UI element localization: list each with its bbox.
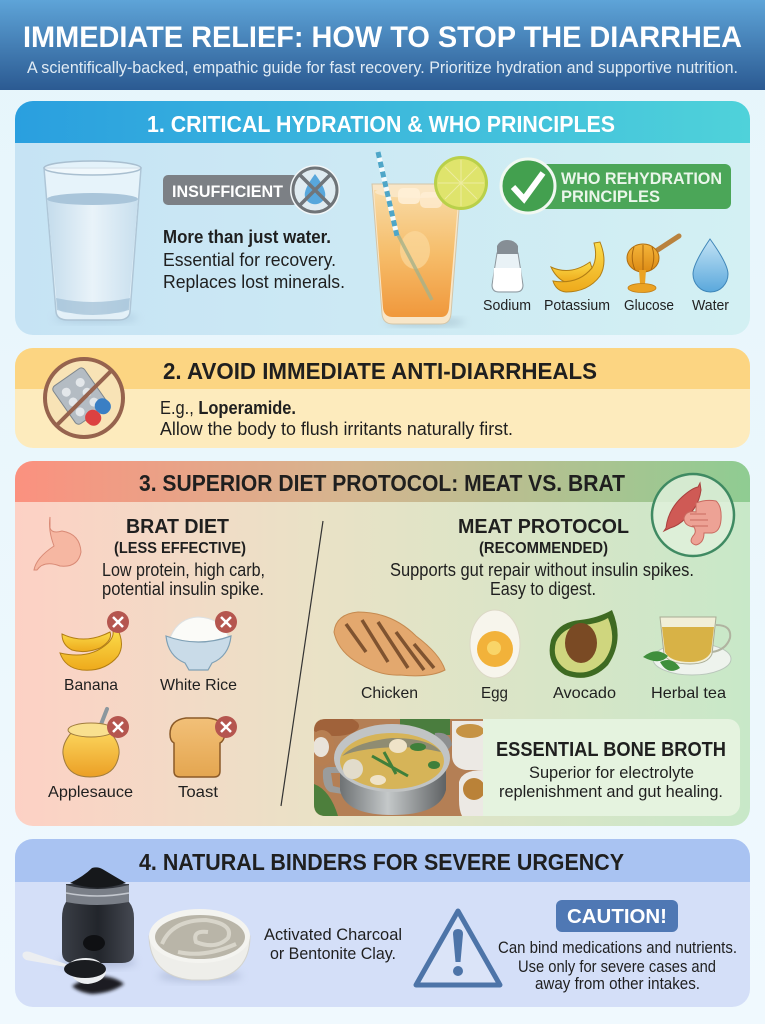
label: banana: Banana (64, 677, 118, 694)
panel: natural binders (15, 839, 750, 1007)
panel: essential bone broth (309, 716, 740, 816)
label: potassium: Potassium (544, 297, 610, 314)
heading: section 1: 1. CRITICAL HYDRATION & WHO PRINCIPLES (147, 111, 615, 137)
text: caution note: Can bind medications and nutrients. (498, 939, 737, 957)
text: more than just water (163, 227, 345, 292)
icon: boiled egg (470, 610, 520, 678)
panel: diet protocol (15, 461, 750, 826)
panel: critical hydration (15, 101, 750, 335)
subtitle: A scientifically-backed, empathic guide for fast recovery. Prioritize hydration and supportive nutrition. (27, 59, 738, 77)
text: bone broth: replenishment and gut healing. (499, 783, 723, 801)
text: loperamide note (160, 398, 513, 439)
label: avocado: Avocado (553, 685, 616, 702)
icon: rehydration drink (372, 152, 488, 326)
icon: no pills (45, 359, 123, 437)
heading: meat protocol: (RECOMMENDED) (479, 540, 608, 557)
icon: water drop (693, 239, 728, 292)
heading: brat diet (114, 516, 246, 557)
text: caution note: Use only for severe cases and (518, 958, 716, 976)
icon: applesauce jar (63, 709, 119, 777)
panel: avoid anti-diarrheals (15, 348, 750, 448)
icon: warning triangle (416, 911, 500, 985)
title: IMMEDIATE RELIEF: HOW TO STOP THE DIARRHEA (23, 21, 742, 54)
text: meat description (390, 560, 694, 599)
text: bone broth (496, 739, 726, 801)
text: loperamide note: Allow the body to flush irritants naturally first. (160, 419, 513, 439)
text: charcoal or clay (264, 925, 402, 963)
label: sodium: Sodium (483, 297, 531, 314)
label: glucose: Glucose (624, 297, 674, 314)
label: white rice: White Rice (160, 677, 237, 694)
icon: glass of water (44, 161, 141, 323)
badge: who rehydration principles: PRINCIPLES (561, 187, 660, 206)
icon: toast (170, 718, 225, 777)
text: charcoal or clay: or Bentonite Clay. (270, 944, 396, 963)
label: chicken: Chicken (361, 685, 418, 702)
label: egg: Egg (481, 685, 508, 702)
icon: potassium banana (551, 242, 604, 292)
text: charcoal or clay: Activated Charcoal (264, 925, 402, 944)
text: caution note: away from other intakes. (535, 975, 700, 993)
heading: section 3: 3. SUPERIOR DIET PROTOCOL: MEAT VS. BRAT (139, 470, 625, 496)
icon: grilled chicken (334, 612, 445, 676)
icon: banana (60, 630, 122, 670)
text: meat description: Easy to digest. (490, 579, 596, 599)
text: more than just water: Replaces lost minerals. (163, 272, 345, 292)
badge: who rehydration principles: WHO REHYDRATION (561, 169, 722, 188)
text: brat description: Low protein, high carb, (102, 560, 265, 580)
heading: section 2: 2. AVOID IMMEDIATE ANTI-DIARRHEALS (163, 358, 597, 384)
badge: who rehydration principles (501, 159, 731, 213)
icon: glucose honey (627, 236, 679, 292)
text: caution note (498, 939, 737, 993)
icon: bentonite clay bowl (149, 909, 250, 982)
text: brat description: potential insulin spike. (102, 579, 264, 599)
label: applesauce: Applesauce (48, 784, 133, 801)
icon: activated charcoal jar (22, 867, 136, 994)
icon: sodium salt shaker (492, 240, 523, 292)
heading: meat protocol (458, 516, 629, 557)
icons: x badges (107, 611, 237, 738)
text: meat description: Supports gut repair without insulin spikes. (390, 560, 694, 580)
text: more than just water: More than just water. (163, 227, 331, 247)
icon: herbal tea (643, 617, 731, 675)
icon: avocado (550, 610, 618, 678)
text: loperamide note: E.g., Loperamide. (160, 398, 296, 418)
icon: rice bowl (166, 617, 231, 670)
heading: brat diet: (LESS EFFECTIVE) (114, 540, 246, 557)
badge: insufficient (163, 165, 340, 215)
badge: caution (556, 900, 678, 932)
label: water: Water (692, 297, 729, 314)
text: brat description (102, 560, 265, 599)
icon: muscle and gut (652, 474, 734, 556)
heading: brat diet: BRAT DIET (126, 516, 229, 538)
icon: stomach (34, 517, 81, 570)
label: herbal tea: Herbal tea (651, 685, 726, 702)
image: pot of broth (309, 716, 485, 816)
divider line (281, 521, 323, 806)
heading: meat protocol: MEAT PROTOCOL (458, 516, 629, 538)
header banner (0, 0, 765, 90)
text: more than just water: Essential for recovery. (163, 250, 336, 270)
badge: insufficient: INSUFFICIENT (172, 182, 284, 201)
badge: caution: CAUTION! (567, 906, 667, 928)
text: bone broth: Superior for electrolyte (529, 764, 694, 782)
label: toast: Toast (178, 784, 219, 801)
text: bone broth: ESSENTIAL BONE BROTH (496, 739, 726, 761)
heading: section 4: 4. NATURAL BINDERS FOR SEVERE URGENCY (139, 849, 624, 875)
